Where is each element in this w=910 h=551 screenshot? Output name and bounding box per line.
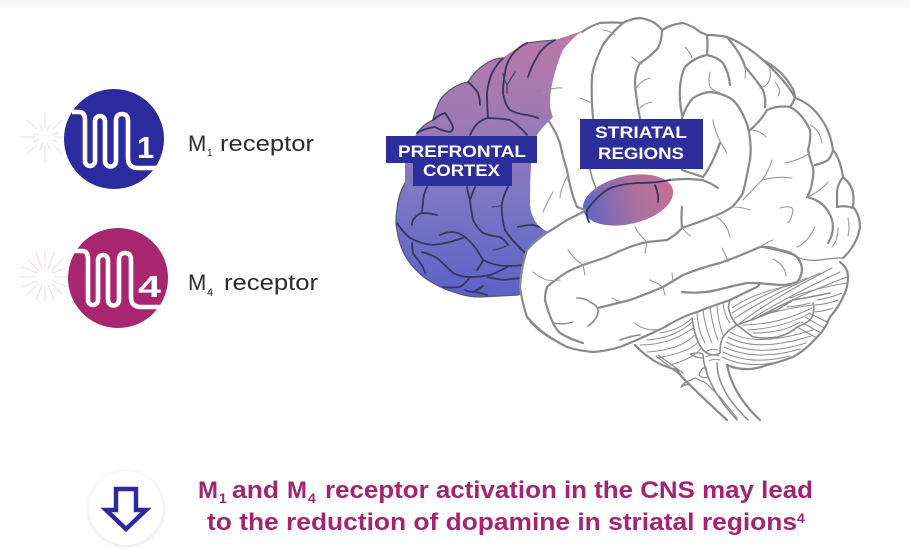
icon: down arrow xyxy=(89,471,163,545)
brainstem xyxy=(656,353,760,420)
sparkle burst: M1 xyxy=(20,113,66,162)
label: M1 receptor xyxy=(188,131,314,159)
key message: receptor activation in the CNS may lead xyxy=(325,477,813,504)
label: M4 receptor xyxy=(188,270,318,299)
receptor meander: M4 xyxy=(75,251,160,307)
fine sulci xyxy=(543,30,615,103)
label: M4 receptor: 4 xyxy=(207,287,213,299)
cerebellum outline xyxy=(727,262,848,369)
frontal gyri xyxy=(592,23,623,118)
label: M4 receptor: receptor xyxy=(224,270,318,295)
label: M1 receptor: 1 xyxy=(207,148,213,159)
label: striatal regions: STRIATAL xyxy=(595,123,687,142)
prefrontal cortex sulci xyxy=(396,40,555,297)
number: 1: 1 xyxy=(137,130,154,165)
label: M1 receptor: M xyxy=(188,131,206,156)
circle: M4 xyxy=(68,228,168,328)
striatal region sulci xyxy=(587,180,670,222)
striatal region highlight xyxy=(578,166,678,234)
key message xyxy=(198,477,813,536)
cerebrum white xyxy=(520,18,860,352)
label: prefrontal cortex: PREFRONTAL xyxy=(398,142,526,161)
key message: 4 xyxy=(308,490,316,506)
key message: 4 xyxy=(797,510,805,526)
key message: 1 xyxy=(219,490,227,506)
label: striatal regions: REGIONS xyxy=(598,144,684,163)
label: M1 receptor: receptor xyxy=(220,131,314,156)
prefrontal cortex gradient xyxy=(396,31,582,297)
circle: M1 xyxy=(64,89,164,189)
label: M4 receptor: M xyxy=(188,270,206,295)
brain illustration xyxy=(396,18,860,420)
label: prefrontal cortex: CORTEX xyxy=(423,161,501,180)
outer outline xyxy=(582,18,860,258)
icon: M1 receptor xyxy=(20,89,164,189)
temporal gyri xyxy=(545,228,682,300)
cerebrum contours xyxy=(520,18,860,352)
cerebellum xyxy=(635,262,848,370)
key message: M xyxy=(198,477,218,504)
cerebellum folia xyxy=(640,268,847,365)
receptor meander: M1 xyxy=(72,112,157,168)
label: striatal regions xyxy=(580,119,703,169)
key message: and xyxy=(232,477,279,504)
key message: to the reduction of dopamine in striatal regions xyxy=(207,509,797,536)
icon: M4 receptor xyxy=(20,228,168,328)
sparkle burst: M4 xyxy=(20,252,68,301)
key message: M xyxy=(287,477,307,504)
label: prefrontal cortex xyxy=(386,136,537,186)
number: 4: 4 xyxy=(138,269,162,304)
